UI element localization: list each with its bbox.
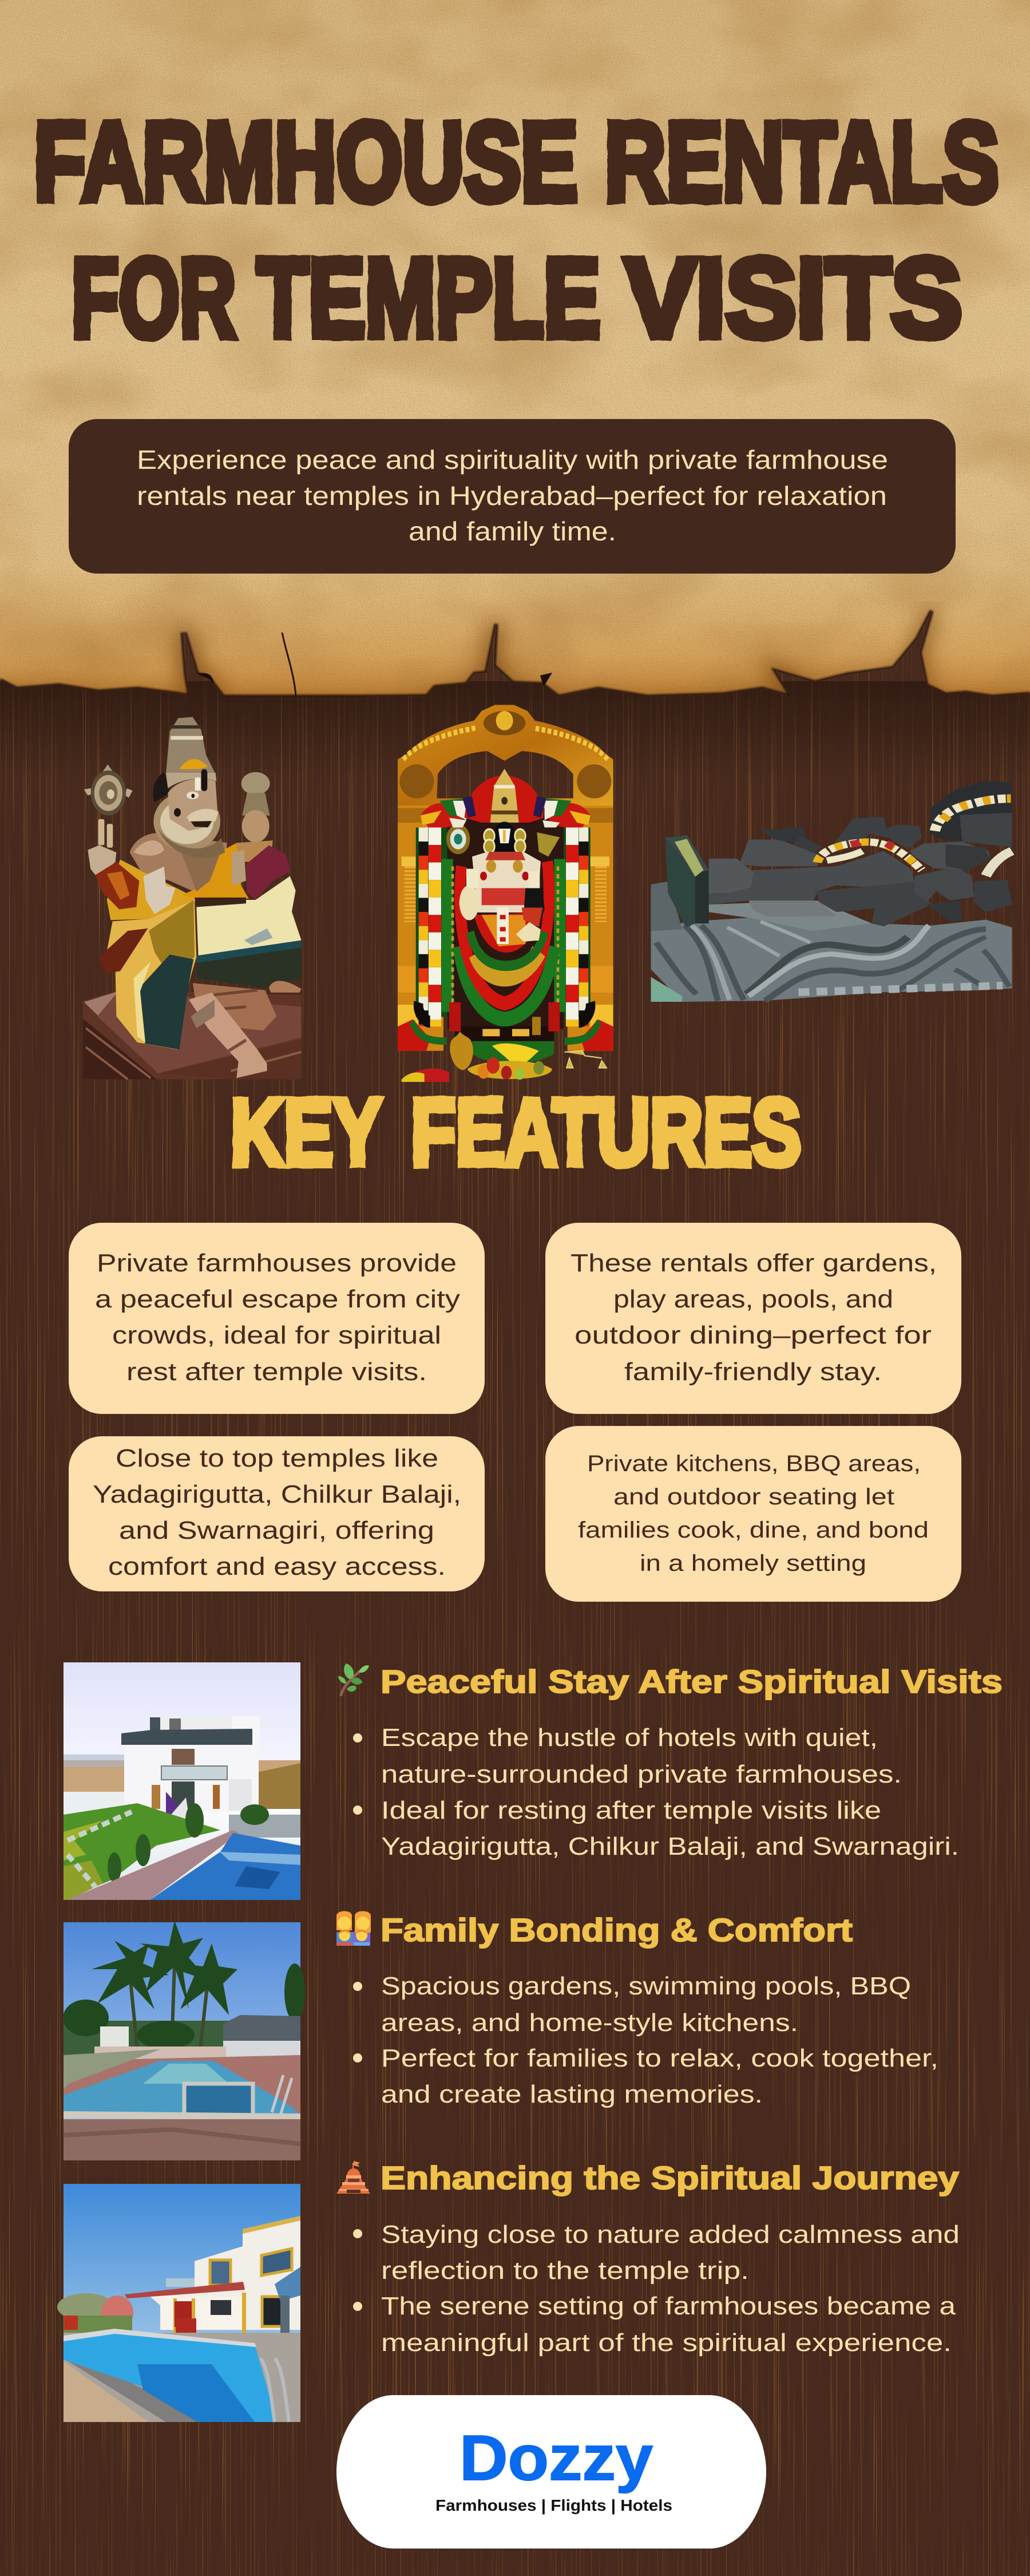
card: close to top temples [69,1436,485,1591]
trees and benches [101,2296,133,2330]
bullets: peaceful stay: Escape the hustle of hotels with quiet, [381,1724,878,1752]
bullets: spiritual journey [353,2221,960,2357]
icon: temple [336,2161,370,2194]
bullets: family bonding: areas, and home-style kitchens. [381,2009,798,2037]
pillars [398,805,443,1051]
title: FOR [72,235,236,361]
green vines [447,859,560,1012]
yellow robe [105,900,196,1049]
card: close to top temples: Close to top temples like [116,1444,438,1472]
photo: white farmhouse with lawn and pool [64,1662,300,1900]
dark embroidered border [196,941,302,988]
bullets: family bonding: Perfect for families to relax, cook together, [381,2044,938,2072]
seat and thigh [193,983,276,1030]
card: close to top temples: comfort and easy access. [108,1552,446,1581]
heading: family bonding: Family Bonding & Comfort [381,1912,853,1949]
card: close to top temples: and Swarnagiri, offering [119,1516,434,1544]
base and offerings [455,1026,554,1042]
icon: leaf sprig [338,1664,369,1695]
torso [130,833,227,893]
lower body [709,851,914,904]
card: family-friendly amenities: These rentals offer gardens, [571,1249,937,1277]
face with namam [493,821,516,856]
card: peaceful escape [69,1223,485,1414]
title: FARMHOUSE [34,99,577,224]
shankha [537,832,560,856]
bullets: spiritual journey: The serene setting of farmhouses became a [381,2292,956,2320]
card: peaceful escape: rest after temple visits. [126,1358,427,1386]
card: close to top temples: Yadagirigutta, Chilkur Balaji, [93,1480,461,1508]
icon: family [336,1911,371,1946]
deck [64,2055,300,2118]
consort [232,772,290,900]
heading: key features: KEY [231,1080,382,1186]
serpent coil base [651,918,1012,1002]
lower body [482,915,525,946]
card: private kitchens: in a homely setting [640,1551,866,1576]
photo: yellow-trim villa with blue pool [57,2184,300,2422]
left flower column [416,828,454,1026]
bullets: peaceful stay: Ideal for resting after temple visits like [381,1796,881,1824]
card: family-friendly amenities: outdoor dining–perfect for [575,1321,932,1349]
blessing hand [144,867,176,914]
logo badge: Dozzy [336,2395,766,2549]
red drape round crown [465,775,544,823]
bullets: spiritual journey: reflection to the temple trip. [381,2257,749,2285]
intro text [137,445,888,546]
green and red U garlands [459,946,554,1020]
card: private kitchens: families cook, dine, and bond [578,1518,929,1543]
tablet at feet [665,837,695,927]
front arm [815,882,932,926]
card: private kitchens: Private kitchens, BBQ areas, [587,1451,921,1476]
left outer blossoms [409,828,438,1026]
card: peaceful escape: Private farmhouses provide [97,1249,457,1277]
raised arm [834,817,922,849]
hood garland [935,799,1011,831]
bullets: peaceful stay [353,1724,959,1860]
dark centre [447,815,564,1029]
heading: peaceful stay: Peaceful Stay After Spiritual Visits [381,1664,1003,1700]
hair [153,772,170,803]
card: family-friendly amenities: play areas, pools, and [613,1285,893,1313]
paving [64,2333,300,2422]
heading: key features [231,1080,801,1186]
card: peaceful escape: crowds, ideal for spiritual [112,1321,441,1349]
title [34,99,999,361]
bullets: spiritual journey: meaningful part of the spiritual experience. [381,2329,952,2357]
bullets: family bonding: and create lasting memories. [381,2080,763,2108]
right block [974,880,1012,912]
bottom corner flowers [398,1020,430,1051]
leg [189,993,267,1078]
title: VISITS [625,235,962,361]
flower clusters at top corners [421,803,465,830]
image: brass Narasimha statue [83,717,302,1079]
yellow cloth behind arm [107,859,199,920]
body garland [818,842,922,870]
right flower column [553,828,591,1026]
intro text: and family time. [409,516,616,546]
chakra [446,824,470,854]
shoulder crown [914,866,974,903]
chakra in hand [84,764,133,878]
card: peaceful escape: a peaceful escape from city [95,1285,460,1313]
heading: enhancing the spiritual journey: Enhancing the Spiritual Journey [381,2160,959,2196]
golden arch [398,705,613,808]
parchment header [0,0,1030,708]
necklace and chest [472,852,541,912]
garden hedge and grass [64,1803,220,1900]
right outer blossoms [569,828,598,1026]
photo: pool with palm trees [63,1921,305,2160]
building [223,2015,300,2055]
intro text: Experience peace and spirituality with private farmhouse [137,445,888,475]
coil ridges [656,922,1009,1001]
bullets: peaceful stay: nature-surrounded private farmhouses. [381,1760,902,1788]
logo wordmark: Dozzy [459,2423,653,2494]
pleated cloth [748,900,837,917]
villa [149,2216,300,2330]
card: family-friendly amenities: family-friendly stay. [624,1358,882,1386]
palm trees [130,1963,207,2049]
hood [929,781,1012,843]
bullets: family bonding: Spacious gardens, swimming pools, BBQ [381,1972,911,2000]
hands and sleeves [459,885,479,920]
face [168,779,217,831]
mane [153,792,220,851]
card: private kitchens [545,1426,961,1602]
head [910,841,991,870]
title: TEMPLE [257,235,600,361]
intro panel [69,419,956,574]
image: reclining Vishnu stone sculpture [651,781,1012,1002]
house [124,1746,259,1812]
sleeve [96,862,139,910]
bullets: peaceful stay: Yadagirigutta, Chilkur Balaji, and Swarnagiri. [381,1832,959,1860]
logo tagline: Farmhouses | Flights | Hotels [435,2496,672,2514]
bullets: spiritual journey: Staying close to nature added calmness and [381,2221,960,2249]
intro text: rentals near temples in Hyderabad–perfect for relaxation [137,481,887,511]
bullets: family bonding [353,1972,938,2108]
cream cloth [196,876,302,957]
pool [64,2330,277,2422]
crown [490,769,519,823]
upper leg [739,840,820,866]
image: Balaji deity with garlands [398,705,613,1082]
garland bases [382,828,485,1017]
crown [166,717,216,774]
card: private kitchens: and outdoor seating let [613,1484,894,1510]
deck and pool [67,1830,239,1900]
card: family-friendly amenities [545,1223,961,1414]
pool [64,2061,300,2115]
heading: key features: FEATURES [411,1080,801,1186]
